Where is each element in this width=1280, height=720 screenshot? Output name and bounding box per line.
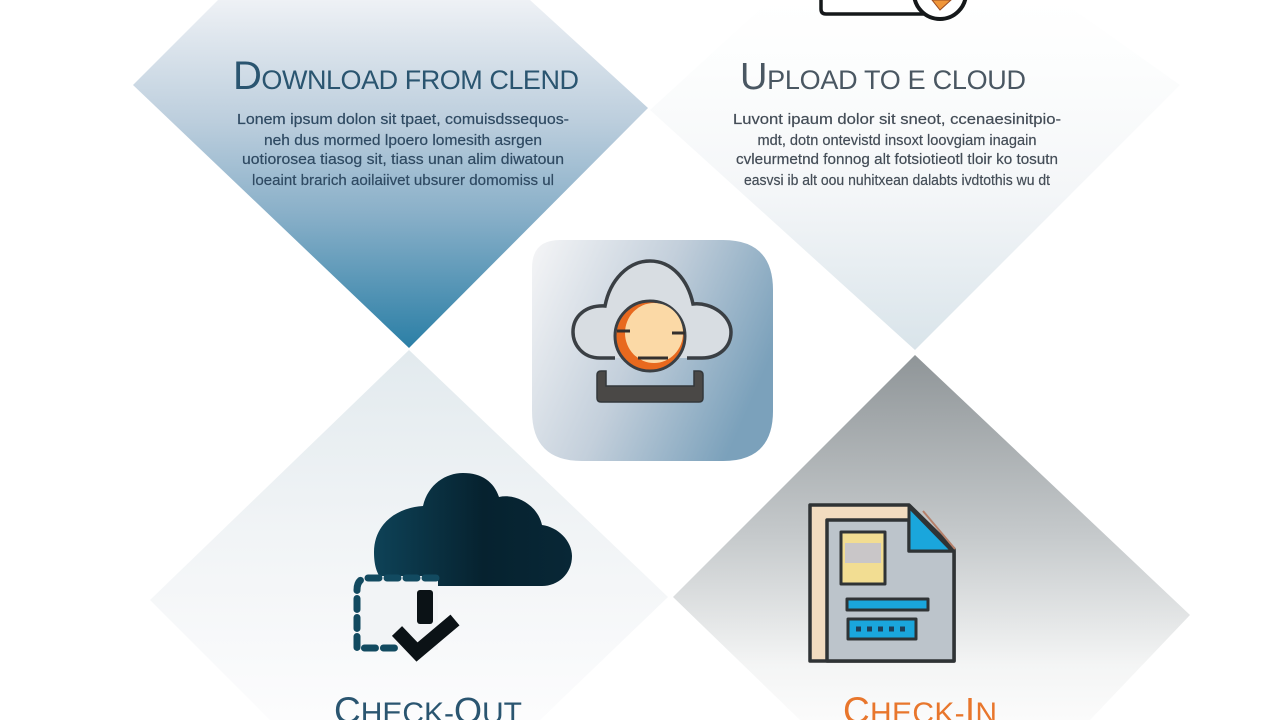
central badge: cloud icon bbox=[532, 240, 773, 461]
text block: upload description: cvleurmetnd fonnog alt fotsiotieotl tloir ko tosutn bbox=[736, 152, 1058, 168]
text block: upload description: Luvont ipaum dolor sit sneot, ccenaesinitpio- bbox=[733, 112, 1061, 128]
heading: upload to cloud: UPLOAD TO E CLOUD bbox=[740, 56, 1026, 98]
text block: upload description: easvsi ib alt oou nuhitxean dalabts ivdtothis wu dt bbox=[744, 173, 1050, 189]
heading: download from cloud: DOWNLOAD FROM CLEND bbox=[233, 54, 579, 98]
panel: check-in bbox=[673, 355, 1190, 720]
panel: download from cloud bbox=[133, 0, 648, 348]
icon: document bbox=[810, 505, 955, 661]
text block: download description: Lonem ipsum dolon sit tpaet, comuisdssequos- bbox=[237, 112, 569, 128]
text block: upload description: mdt, dotn ontevistd insoxt loovgiam inagain bbox=[758, 133, 1036, 149]
panel: upload to cloud bbox=[650, 0, 1180, 350]
text block: download description: uotiorosea tiasog sit, tiass unan alim diwatoun bbox=[242, 152, 564, 168]
text block: download description bbox=[237, 112, 569, 189]
text block: download description: loeaint brarich aoilaiivet ubsurer domomiss ul bbox=[252, 173, 554, 189]
text block: upload description bbox=[733, 112, 1061, 189]
icon: cloud with circle and tray bbox=[573, 261, 731, 402]
panel: check-out bbox=[150, 350, 668, 720]
text block: download description: neh dus mormed lpoero lomesith asrgen bbox=[264, 133, 542, 149]
icon: cloud with dashed box and check bbox=[357, 473, 572, 652]
icon: upload card bbox=[821, 0, 966, 19]
